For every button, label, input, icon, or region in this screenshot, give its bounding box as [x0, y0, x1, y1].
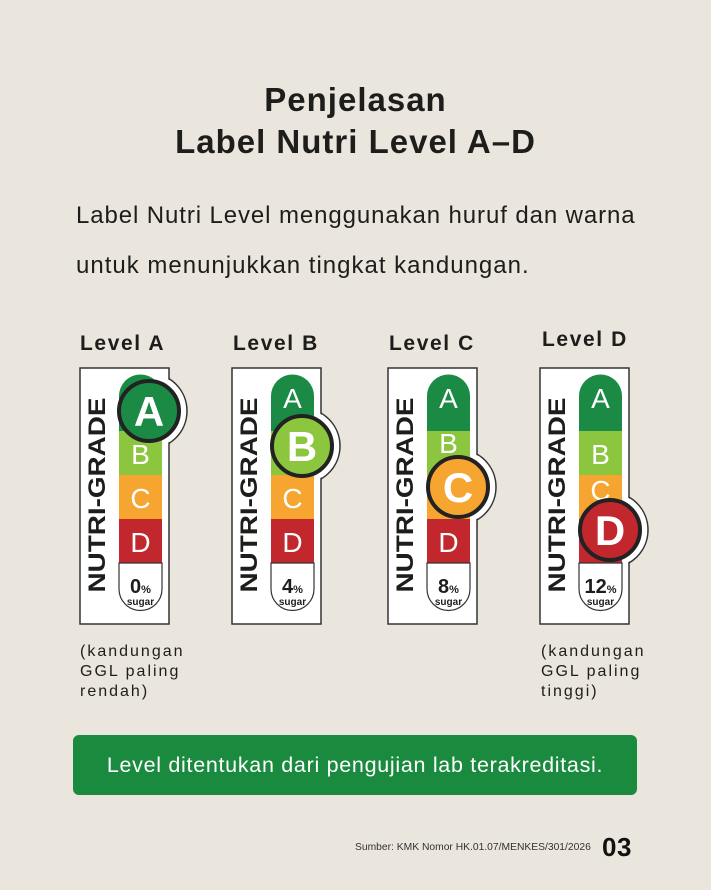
label: Level A: sugar [127, 597, 154, 608]
label: Level B: A [283, 383, 302, 414]
label: Level B: 4% [282, 576, 303, 598]
label: Level C: sugar [435, 597, 462, 608]
label: Level D: 12% [584, 576, 617, 598]
page number: 03 [602, 832, 632, 862]
label: Level A: C [130, 483, 151, 514]
label: Level A: 0% [130, 576, 151, 598]
label: Level C: B [439, 428, 458, 459]
note: lowest: GGL paling [80, 663, 180, 680]
label: Level C: D [438, 527, 459, 558]
label: Level D: sugar [587, 597, 614, 608]
label: Level D [539, 367, 649, 625]
label: Level A: D [130, 527, 151, 558]
intro text: untuk menunjukkan tingkat kandungan. [76, 252, 530, 279]
heading: Level B: Level B [233, 332, 319, 355]
note: highest: GGL paling [541, 663, 641, 680]
label: Level C: A [439, 383, 458, 414]
label: Level A: A [134, 388, 164, 435]
source footnote: Sumber: KMK Nomor HK.01.07/MENKES/301/2026 [355, 842, 591, 853]
title: Penjelasan [264, 81, 447, 118]
label: Level D: D [595, 507, 625, 554]
label: Level D: NUTRI-GRADE [544, 398, 571, 592]
label: Level D: A [591, 383, 610, 414]
heading: Level A: Level A [80, 332, 165, 355]
label: Level D: C [590, 475, 611, 506]
intro text: Label Nutri Level menggunakan huruf dan warna [76, 202, 636, 229]
label: Level A: NUTRI-GRADE [84, 398, 111, 592]
note: lowest [80, 643, 185, 700]
note: lowest: (kandungan [80, 643, 185, 660]
intro text [76, 202, 636, 279]
title: Label Nutri Level A–D [175, 123, 536, 160]
label: Level B [231, 367, 341, 625]
note: highest [541, 643, 646, 700]
label: Level C [387, 367, 497, 625]
note: lowest: rendah) [80, 683, 149, 700]
label: Level B: B [287, 423, 317, 470]
label: Level D: B [591, 439, 610, 470]
callout banner: Level ditentukan dari pengujian lab terakreditasi. [107, 753, 603, 777]
heading: Level C: Level C [389, 332, 475, 355]
title [175, 81, 536, 160]
label: Level C: NUTRI-GRADE [392, 398, 419, 592]
label: Level C: 8% [438, 576, 459, 598]
label: Level B: D [282, 527, 303, 558]
label: Level C: C [443, 464, 473, 511]
note: highest: tinggi) [541, 683, 599, 700]
label: Level A [79, 367, 188, 625]
heading: Level D: Level D [542, 328, 628, 351]
label: Level B: NUTRI-GRADE [236, 398, 263, 592]
label: Level A: B [131, 439, 150, 470]
label: Level B: C [282, 483, 303, 514]
note: highest: (kandungan [541, 643, 646, 660]
label: Level B: sugar [279, 597, 306, 608]
callout banner [73, 735, 637, 795]
